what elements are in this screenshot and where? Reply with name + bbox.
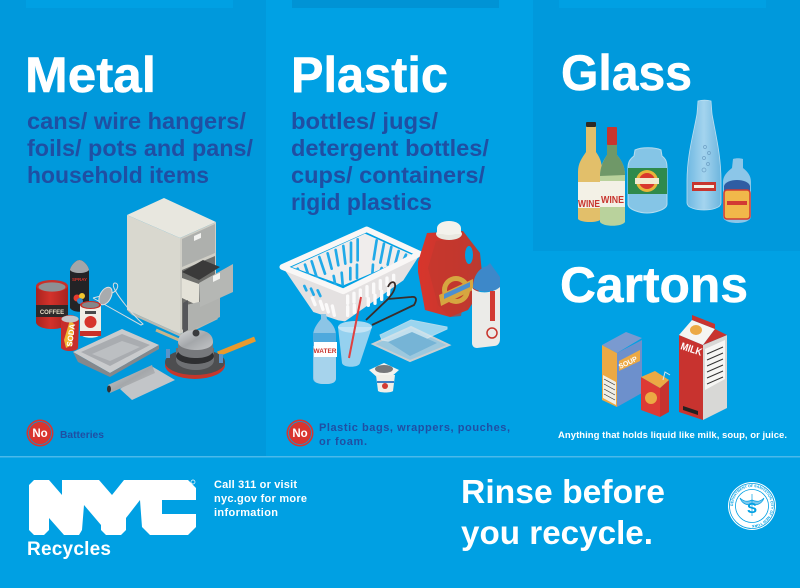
icon: coffee can: COFFEE [40, 310, 64, 316]
icon: yogurt cup [369, 363, 399, 392]
icon: sanitation department seal: DEPARTMENT OF SANITATION CITY OF NEW YORK [730, 484, 774, 528]
text: metal items list [27, 108, 254, 188]
icon: pan and pots [156, 330, 255, 379]
panel: footer [0, 456, 800, 560]
icon: coffee can [36, 280, 68, 329]
icon: soda can [61, 315, 79, 351]
panel: cartons [533, 251, 800, 456]
icon: detergent jug [418, 221, 482, 317]
text: contact information: Call 311 or visit [214, 479, 297, 491]
text: contact information [214, 479, 307, 519]
text: metal items list: foils/ pots and pans/ [27, 135, 254, 161]
heading: Plastic: Plastic [291, 47, 448, 103]
text: plastic items list: bottles/ jugs/ [291, 108, 439, 134]
icon: soda can: SODA [65, 323, 77, 347]
panel: glass [533, 0, 800, 251]
icon: sanitation department seal: S [747, 500, 757, 517]
callout: no plastic bags: or foam. [319, 436, 367, 448]
text: rinse before you recycle [461, 473, 665, 551]
icon: white wine bottle [578, 122, 602, 222]
callout: no batteries: No [32, 428, 48, 440]
text: plastic items list: rigid plastics [291, 189, 432, 215]
heading: Metal: Metal [25, 47, 156, 103]
icon: baking tray [73, 329, 159, 377]
panel: metal [0, 0, 266, 456]
icon: milk carton: MILK [679, 341, 703, 359]
icon: plastic hanger [366, 282, 416, 325]
icon: plastic cup with straw [338, 297, 372, 367]
text: plastic items list: cups/ containers/ [291, 162, 486, 188]
icon: glass jar [628, 148, 667, 213]
text: plastic items list: detergent bottles/ [291, 135, 490, 161]
icon: white sports bottle [472, 263, 500, 348]
icon: soup carton [602, 332, 642, 407]
icon: milk carton [679, 315, 727, 420]
heading: Cartons: Cartons [560, 257, 748, 313]
callout: no plastic bags: No [292, 428, 308, 440]
icon: spray can [70, 260, 89, 312]
icon: green wine bottle: WINE [601, 195, 624, 206]
logo: NYC [29, 480, 196, 535]
text: rinse before you recycle: Rinse before [461, 473, 665, 510]
text: plastic items list [291, 108, 490, 215]
icon: juice box [641, 371, 670, 417]
text: Recycles: Recycles [27, 539, 111, 560]
callout: no plastic bags: Plastic bags, wrappers, pouches, [319, 422, 510, 434]
icon: small blue bottle [723, 158, 751, 223]
icon: soup carton: SOUP [618, 356, 639, 371]
text: contact information: nyc.gov for more [214, 493, 307, 505]
text: cartons note: Anything that holds liquid like milk, soup, or juice. [558, 430, 787, 441]
icon: water bottle: WATER [314, 348, 337, 355]
heading: Glass: Glass [561, 45, 692, 101]
text: rinse before you recycle: you recycle. [461, 514, 653, 551]
icon: tall clear bottle [687, 100, 721, 210]
text: metal items list: household items [27, 162, 209, 188]
icon: can lid and wire hanger [93, 283, 143, 325]
text: contact information: information [214, 507, 278, 519]
panel: plastic [266, 0, 533, 456]
callout: no batteries: Batteries [60, 430, 104, 441]
callout: no batteries [26, 420, 104, 446]
icon: spray can: SPRAY [72, 277, 87, 282]
icon: tomato can [80, 301, 101, 338]
icon: filing cabinet [127, 198, 233, 337]
icon: laundry basket [282, 229, 420, 321]
icon: clamshell container [373, 320, 449, 361]
callout: no plastic bags [286, 420, 510, 448]
icon: water bottle [313, 314, 337, 384]
icon: aluminum foil [107, 365, 175, 400]
icon: white wine bottle: WINE [578, 199, 600, 210]
icon: green wine bottle [600, 127, 625, 226]
text: metal items list: cans/ wire hangers/ [27, 108, 247, 134]
